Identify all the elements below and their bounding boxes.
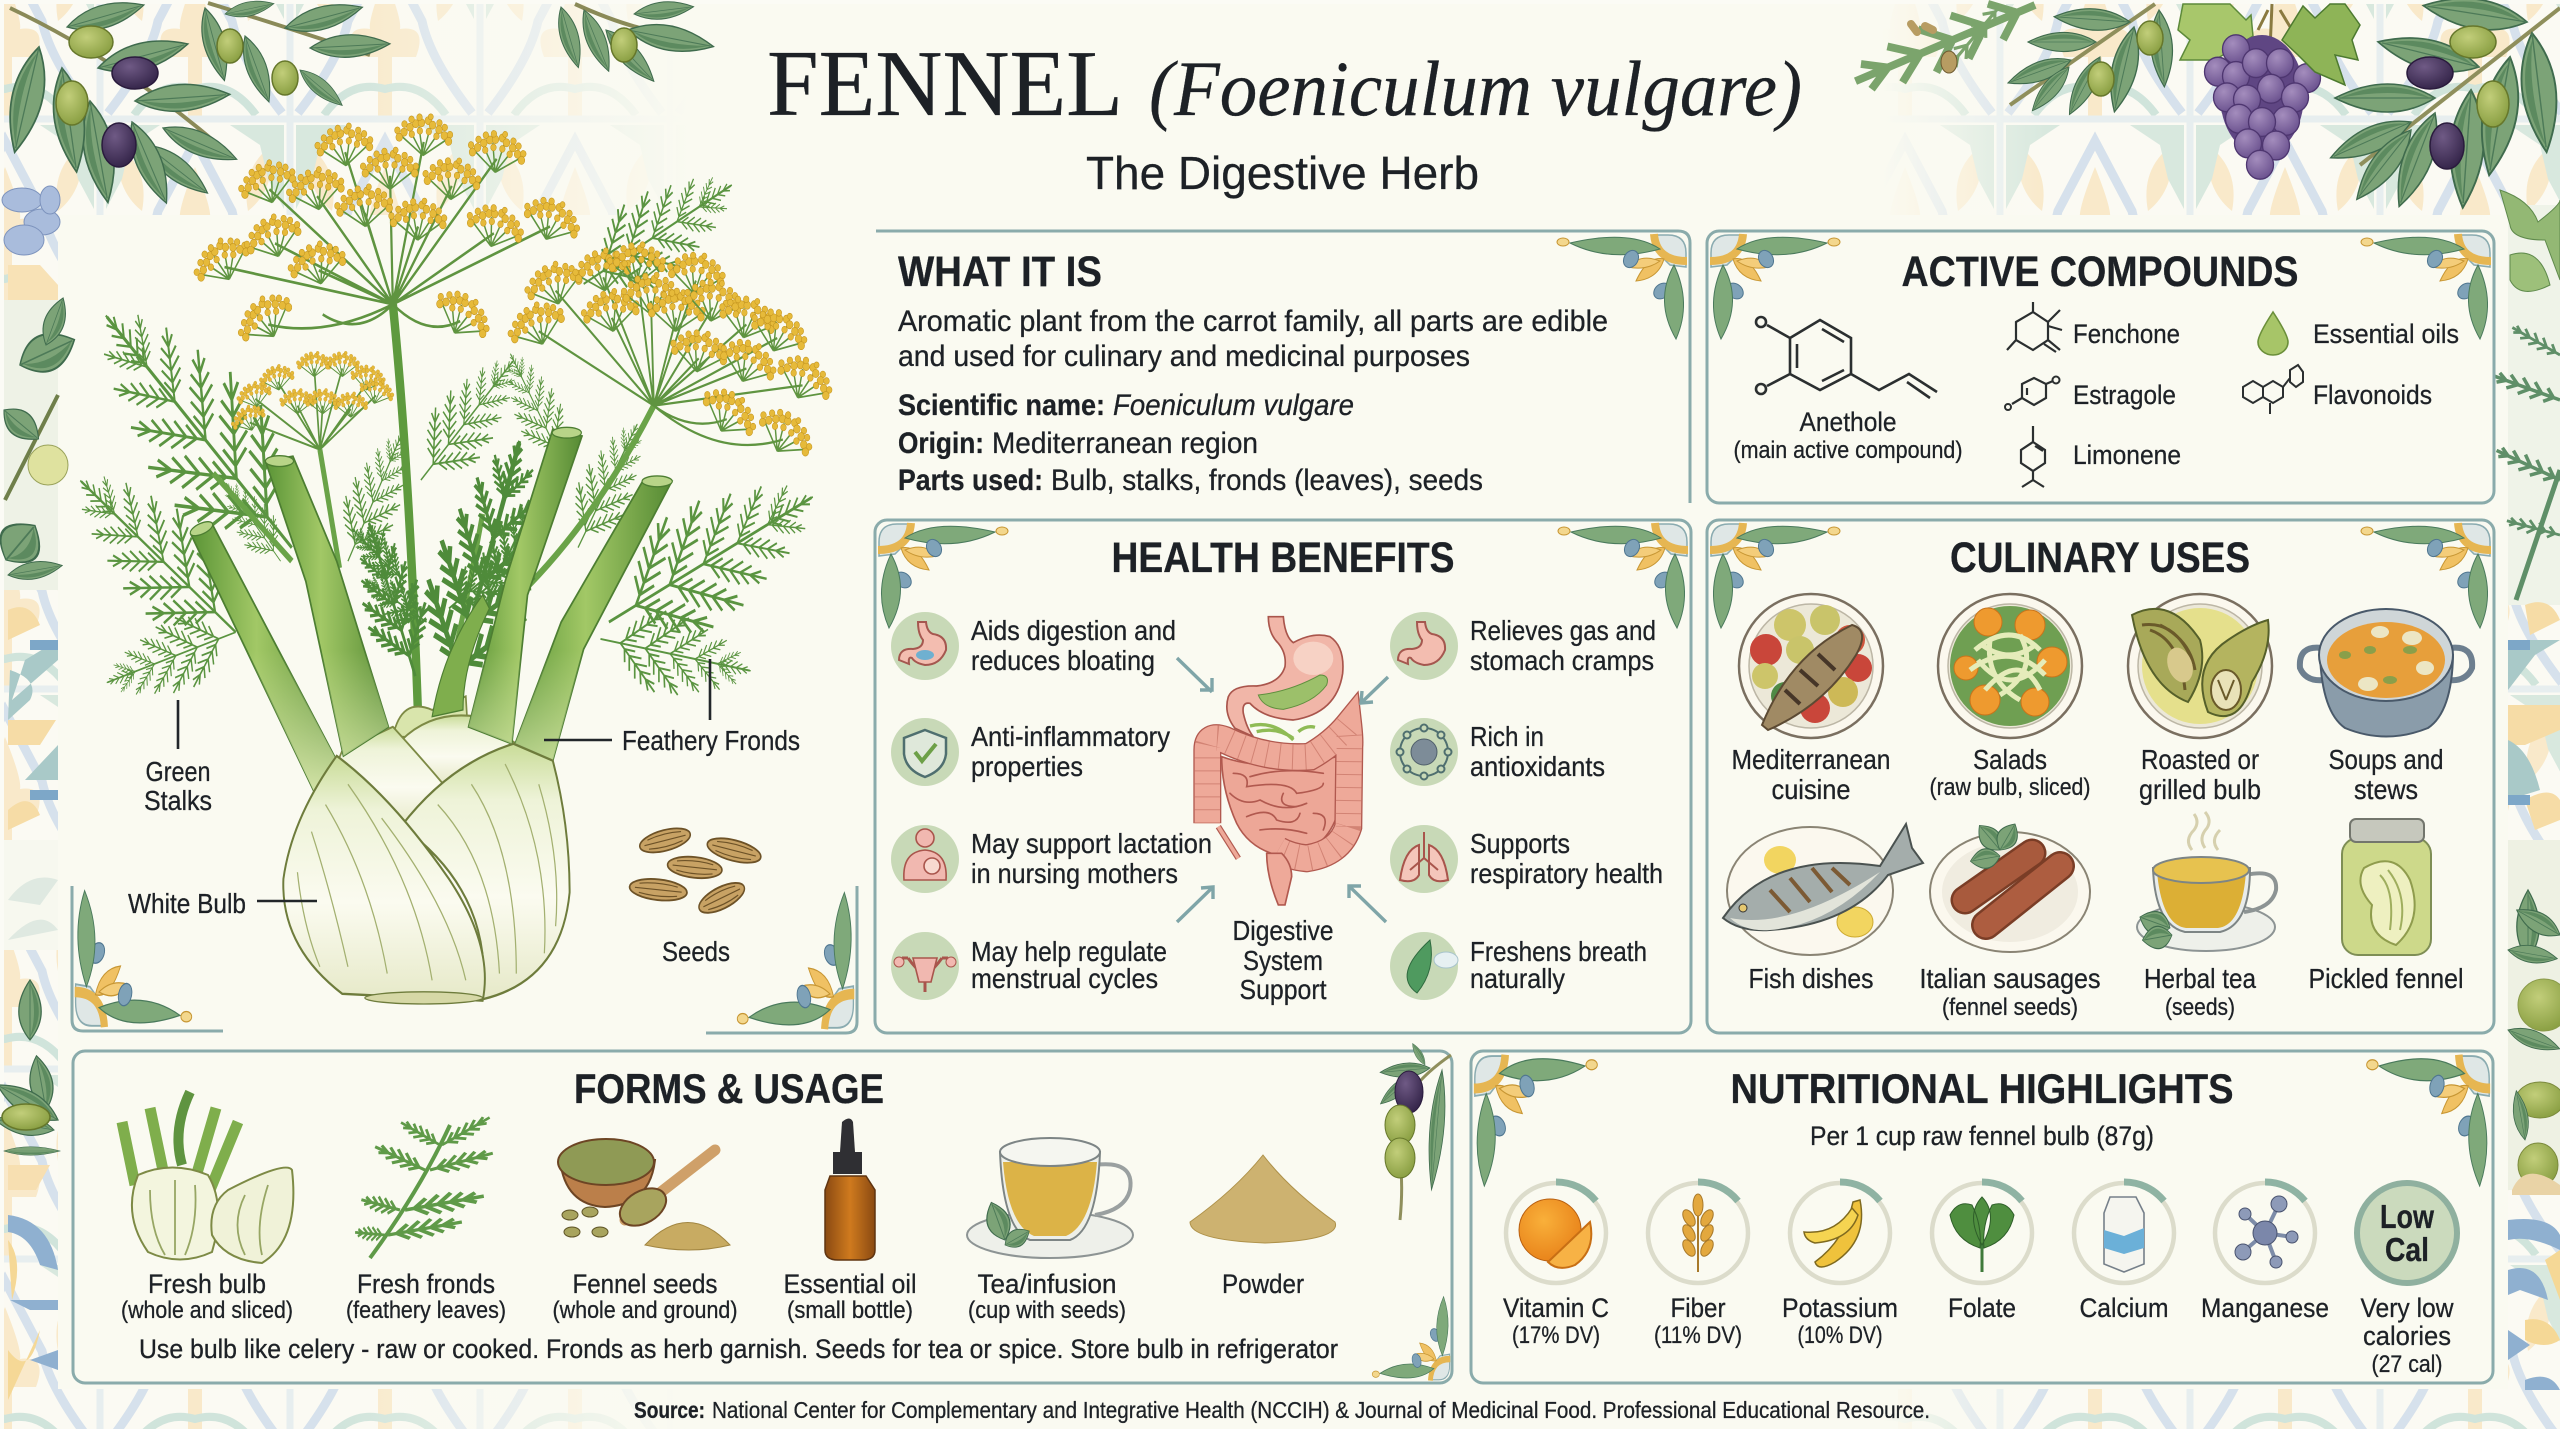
benefit: anti-inflammatory: properties [971, 751, 1083, 782]
title [767, 32, 1802, 136]
nutrient: folate [1932, 1182, 2032, 1323]
compound: limonene: Limonene [2073, 440, 2181, 470]
form: tea infusion: Tea/infusion [978, 1269, 1116, 1299]
nutrient: low calorie badge [2357, 1183, 2457, 1378]
stems [393, 304, 418, 717]
heading: FORMS & USAGE [574, 1065, 884, 1112]
item: Salads [1930, 594, 2090, 801]
item: Italian sausages: (fennel seeds) [1942, 994, 2078, 1021]
nutrient: vitamin C: Vitamin C [1503, 1293, 1609, 1323]
anethole molecule [1756, 317, 1937, 398]
form: tea infusion [967, 1138, 1133, 1324]
label: White Bulb: White Bulb [128, 888, 246, 919]
right bulb lobe [401, 744, 570, 999]
item: Roasted or grilled bulb [2128, 594, 2272, 805]
form: fresh bulb [121, 1092, 293, 1324]
form: fresh fronds: (feathery leaves) [346, 1297, 506, 1324]
description: Aromatic plant from the carrot family, all parts are edible [898, 305, 1608, 338]
heading: NUTRITIONAL HIGHLIGHTS [1730, 1065, 2234, 1112]
border decoration: top-right herbs, grapes and olives [1846, 0, 2560, 211]
form: essential oil [784, 1118, 916, 1324]
item: Pickled fennel [2308, 819, 2464, 994]
compound: estragole [2005, 376, 2176, 410]
nutrient: vitamin C [1503, 1182, 1609, 1349]
item: Herbal tea: Herbal tea [2144, 963, 2256, 994]
item: Salads: Salads [1973, 744, 2047, 775]
arrows [1177, 658, 1388, 922]
nutrient: fiber [1648, 1182, 1748, 1349]
facts: Bulb, stalks, fronds (leaves), seeds [1051, 464, 1483, 497]
item: Mediterranean cuisine [1732, 594, 1890, 805]
border decoration: top-left olive branches [0, 0, 716, 208]
label: Seeds: Seeds [662, 936, 730, 967]
border decoration: right strip [2491, 190, 2560, 1390]
nutrient: low calorie badge: (27 cal) [2372, 1351, 2442, 1378]
heading: HEALTH BENEFITS [1112, 534, 1454, 582]
anethole label: (main active compound) [1734, 437, 1962, 464]
nutrient: manganese: Manganese [2201, 1293, 2329, 1323]
nutrient: low calorie badge: Cal [2385, 1231, 2429, 1268]
benefit: digestion: reduces bloating [971, 645, 1155, 676]
item: Salads: (raw bulb, sliced) [1930, 774, 2090, 801]
benefit: respiratory [1390, 825, 1663, 893]
item: Roasted or grilled bulb: grilled bulb [2139, 774, 2261, 805]
umbel right [503, 242, 839, 468]
diagram caption: Support [1240, 974, 1327, 1005]
item: Italian sausages [1920, 819, 2100, 1021]
facts: Foeniculum vulgare [1113, 389, 1354, 422]
item: Mediterranean cuisine: Mediterranean [1732, 744, 1890, 775]
description: and used for culinary and medicinal purposes [898, 340, 1470, 373]
form: fresh bulb: Fresh bulb [148, 1269, 266, 1299]
nutrient: potassium: Potassium [1782, 1293, 1898, 1323]
form: essential oil: (small bottle) [787, 1297, 913, 1324]
compound: fenchone [2007, 302, 2180, 352]
panel: active compounds [1707, 231, 2494, 503]
benefit: lactation: May support lactation [971, 828, 1212, 859]
fronds [47, 138, 840, 724]
form: fresh fronds: Fresh fronds [357, 1269, 495, 1299]
benefit: menstrual [891, 932, 1167, 1000]
benefit: antioxidants [1390, 718, 1605, 786]
label: Green Stalks: Stalks [144, 785, 212, 816]
panel: forms and usage [73, 1042, 1452, 1383]
panel corner lines [72, 886, 857, 1033]
panel: health benefits [875, 520, 1691, 1033]
bulb veins [297, 764, 557, 980]
form: powder [1190, 1155, 1336, 1299]
source line: National Center for Complementary and Integrative Health (NCCIH) & Journal of Medicinal Food. Professional Educational Resource. [712, 1397, 1930, 1423]
form: fresh fronds [346, 1112, 506, 1324]
nutrient: low calorie badge: Very low [2360, 1293, 2454, 1323]
nutrient: manganese [2201, 1182, 2329, 1323]
central dense frond [335, 419, 577, 726]
form: fennel seeds: Fennel seeds [572, 1269, 718, 1299]
benefit: antioxidants: antioxidants [1470, 751, 1605, 782]
olive branch corner [1376, 1042, 1451, 1220]
facts: Mediterranean region [992, 427, 1258, 460]
nutrient: calcium [2074, 1182, 2174, 1323]
benefit: menstrual: menstrual cycles [971, 963, 1158, 994]
benefit: anti-inflammatory [891, 718, 1170, 786]
heading: ACTIVE COMPOUNDS [1902, 248, 2298, 296]
form: fresh bulb: (whole and sliced) [121, 1297, 293, 1324]
anethole label [1734, 407, 1962, 464]
benefit: anti-inflammatory: Anti-inflammatory [971, 721, 1170, 752]
border decoration: left strip [0, 186, 82, 1400]
benefit: menstrual: May help regulate [971, 936, 1167, 967]
title: FENNEL [767, 32, 1123, 136]
seeds [629, 824, 763, 919]
form: fennel seeds [552, 1139, 738, 1324]
item: Herbal tea [2136, 812, 2276, 1021]
left bulb lobe [283, 756, 485, 1001]
item: Fish dishes: Fish dishes [1748, 963, 1874, 994]
serving note: Per 1 cup raw fennel bulb (87g) [1810, 1121, 2154, 1151]
benefit: gas relief [1390, 612, 1656, 680]
diagram caption [1232, 915, 1334, 1005]
heading: WHAT IT IS [898, 248, 1102, 296]
diagram caption: Digestive [1232, 915, 1334, 946]
benefit: breath [1390, 932, 1647, 1000]
panel: nutritional highlights [1471, 1051, 2493, 1383]
compound: limonene [2021, 426, 2181, 487]
benefit: gas relief: Relieves gas and [1470, 615, 1656, 646]
label: Green Stalks: Green [146, 756, 210, 787]
facts: Origin: [898, 427, 984, 460]
nutrient: low calorie badge: calories [2363, 1321, 2451, 1351]
back bulb layers [393, 696, 469, 784]
source line: Source: [634, 1397, 705, 1423]
benefit: gas relief: stomach cramps [1470, 645, 1654, 676]
nutrient: calcium: Calcium [2080, 1293, 2168, 1323]
benefit: lactation: in nursing mothers [971, 858, 1178, 889]
facts: Parts used: [898, 464, 1043, 497]
form: essential oil: Essential oil [784, 1269, 916, 1299]
benefit: breath: naturally [1470, 963, 1565, 994]
nutrient: potassium [1782, 1182, 1898, 1349]
benefit: respiratory: Supports [1470, 828, 1570, 859]
usage note: Use bulb like celery - raw or cooked. Fronds as herb garnish. Seeds for tea or spice. Store bulb in refrigerator [139, 1334, 1338, 1364]
anethole label: Anethole [1800, 407, 1896, 437]
nutrient: potassium: (10% DV) [1798, 1322, 1882, 1349]
benefit: breath: Freshens breath [1470, 936, 1647, 967]
label: Green Stalks [144, 756, 212, 816]
diagram caption: System [1243, 945, 1323, 976]
benefit: digestion: Aids digestion and [971, 615, 1176, 646]
form: powder: Powder [1222, 1269, 1304, 1299]
nutrient: vitamin C: (17% DV) [1512, 1322, 1600, 1349]
compound: essential oils [2258, 312, 2459, 355]
green stalks [265, 456, 388, 756]
label lines [178, 659, 710, 901]
panel: fennel plant illustration [47, 111, 857, 1033]
nutrient: folate: Folate [1948, 1293, 2016, 1323]
benefit: lactation [891, 825, 1212, 893]
umbel main [187, 111, 585, 354]
form: fennel seeds: (whole and ground) [552, 1297, 738, 1324]
compound: fenchone: Fenchone [2073, 319, 2180, 349]
item: Herbal tea: (seeds) [2165, 994, 2235, 1021]
description [898, 305, 1608, 373]
facts: Scientific name: [898, 389, 1105, 422]
panel: culinary uses [1707, 520, 2494, 1033]
facts [898, 389, 1483, 497]
panel: what it is [876, 231, 1690, 503]
benefit: respiratory: respiratory health [1470, 858, 1663, 889]
compound: estragole: Estragole [2073, 380, 2176, 410]
benefit: antioxidants: Rich in [1470, 721, 1544, 752]
nutrient: fiber: Fiber [1670, 1293, 1726, 1323]
nutrient: low calorie badge: Low [2380, 1198, 2434, 1235]
compound: essential oils: Essential oils [2313, 319, 2459, 349]
item: Soups and stews [2300, 609, 2472, 805]
title: (Foeniculum vulgare) [1149, 45, 1802, 132]
item: Pickled fennel: Pickled fennel [2308, 963, 2464, 994]
item: Roasted or grilled bulb: Roasted or [2141, 744, 2259, 775]
form: tea infusion: (cup with seeds) [968, 1297, 1126, 1324]
item: Soups and stews: stews [2354, 774, 2418, 805]
compound: flavonoids: Flavonoids [2313, 380, 2432, 410]
compound: flavonoids [2243, 365, 2432, 414]
subtitle: The Digestive Herb [1086, 147, 1479, 199]
item: Soups and stews: Soups and [2328, 744, 2444, 775]
item: Fish dishes [1723, 824, 1923, 994]
heading: CULINARY USES [1950, 534, 2250, 582]
label: Feathery Fronds: Feathery Fronds [622, 725, 800, 756]
item: Italian sausages: Italian sausages [1920, 963, 2100, 994]
nutrient: fiber: (11% DV) [1654, 1322, 1742, 1349]
item: Mediterranean cuisine: cuisine [1772, 774, 1850, 805]
benefit: digestion [891, 612, 1176, 680]
umbel small [228, 351, 396, 450]
plant drawing [47, 111, 840, 1004]
digestive system illustration [1207, 617, 1350, 905]
